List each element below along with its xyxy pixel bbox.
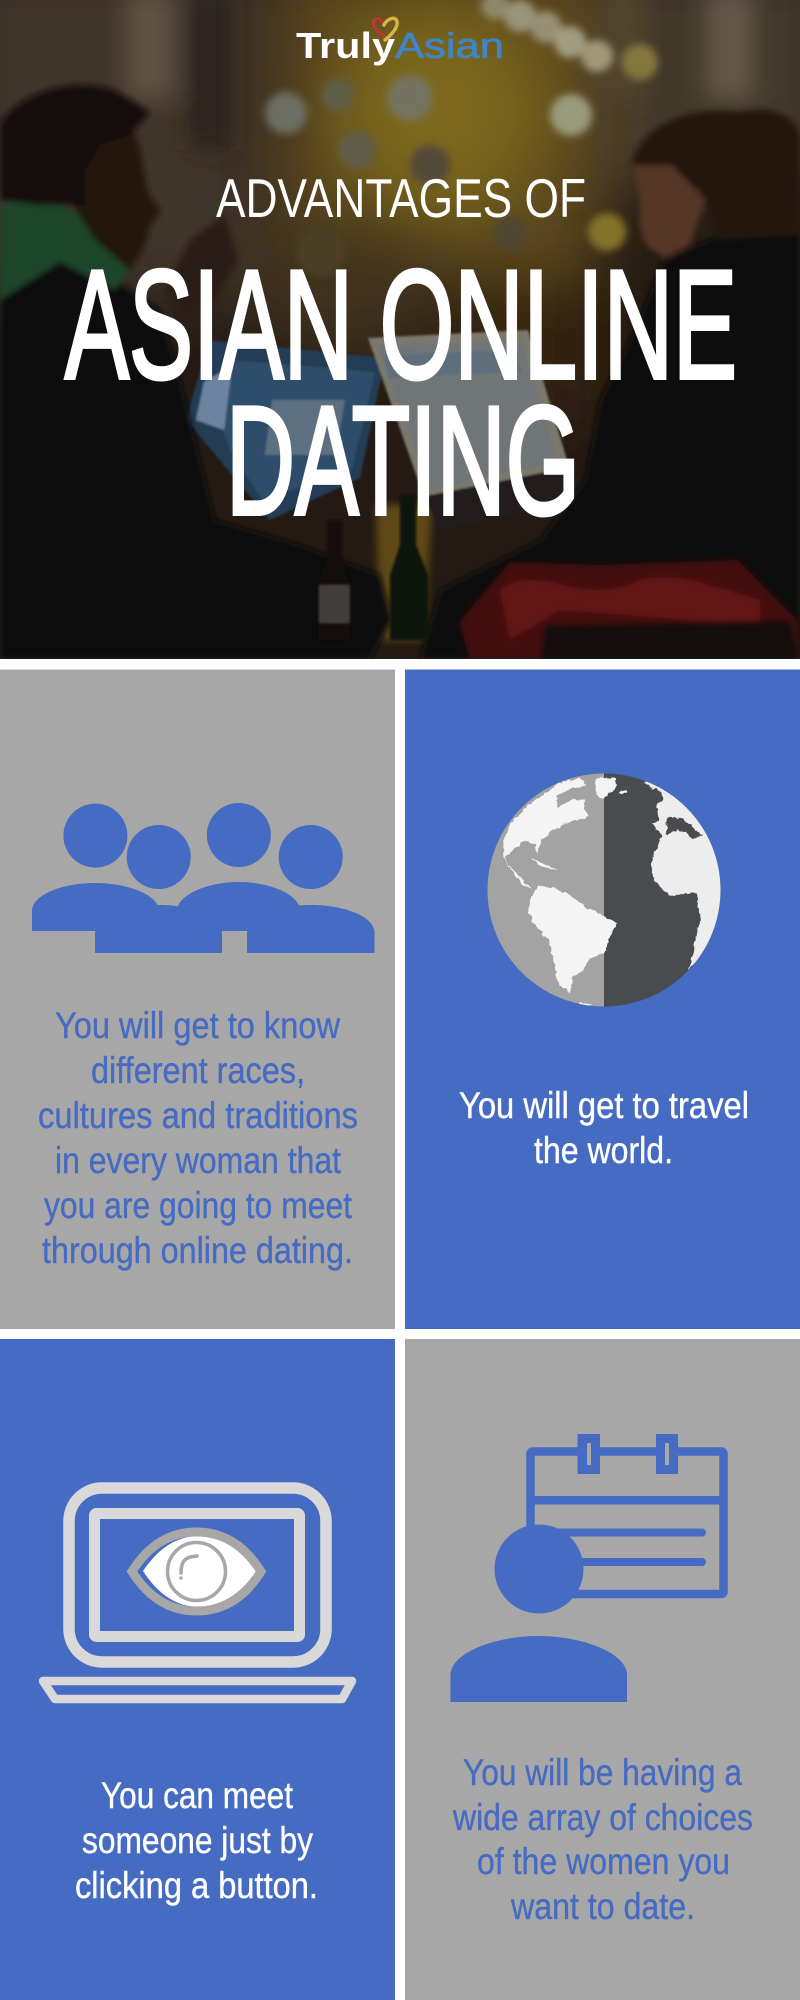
hero photo: couple with laptops <box>0 0 800 659</box>
text: travel: You will get to travel <box>459 1084 749 1126</box>
text: choices: You will be having a <box>463 1751 742 1793</box>
text: choices <box>452 1751 753 1927</box>
bottles <box>318 495 428 640</box>
text: choices: of the women you <box>477 1840 730 1882</box>
text: travel: the world. <box>534 1129 673 1171</box>
text: choices: want to date. <box>510 1885 695 1927</box>
red bag <box>459 560 800 659</box>
panel: click <box>0 1339 395 2000</box>
panel: travel <box>405 670 800 1329</box>
icon: globe <box>488 774 720 1006</box>
text: click <box>75 1774 318 1906</box>
logo: TrulyAsian: Truly <box>296 25 395 66</box>
text: cultures: you are going to meet <box>44 1184 352 1226</box>
logo: TrulyAsian: Asian <box>395 25 504 66</box>
text: cultures: through online dating. <box>42 1229 353 1271</box>
icon: laptop with eye <box>43 1488 352 1699</box>
text: click: You can meet <box>101 1774 293 1816</box>
panel: hero header <box>0 0 800 659</box>
text: travel <box>459 1084 749 1171</box>
text: cultures: different races, <box>91 1049 305 1091</box>
title: advantages of: ADVANTAGES OF <box>216 167 586 229</box>
logo: TrulyAsian <box>296 18 504 66</box>
left figure <box>0 85 392 659</box>
title: dating: DATING <box>226 374 580 547</box>
text: choices: wide array of choices <box>452 1796 753 1838</box>
panel: choices <box>405 1339 800 2000</box>
right figure <box>420 110 800 659</box>
yellow gap between figures <box>376 505 432 640</box>
left laptop <box>186 340 385 520</box>
text: cultures: in every woman that <box>55 1139 341 1181</box>
panel: cultures <box>0 670 395 1329</box>
icon: calendar and person <box>450 1434 724 1702</box>
text: click: someone just by <box>82 1819 313 1861</box>
text: cultures: cultures and traditions <box>38 1094 358 1136</box>
icon: group of people <box>32 803 374 953</box>
text: cultures <box>38 1004 358 1271</box>
text: cultures: You will get to know <box>55 1004 341 1046</box>
logo heart <box>373 18 397 40</box>
right laptop <box>368 330 585 530</box>
text: click: clicking a button. <box>75 1864 318 1906</box>
